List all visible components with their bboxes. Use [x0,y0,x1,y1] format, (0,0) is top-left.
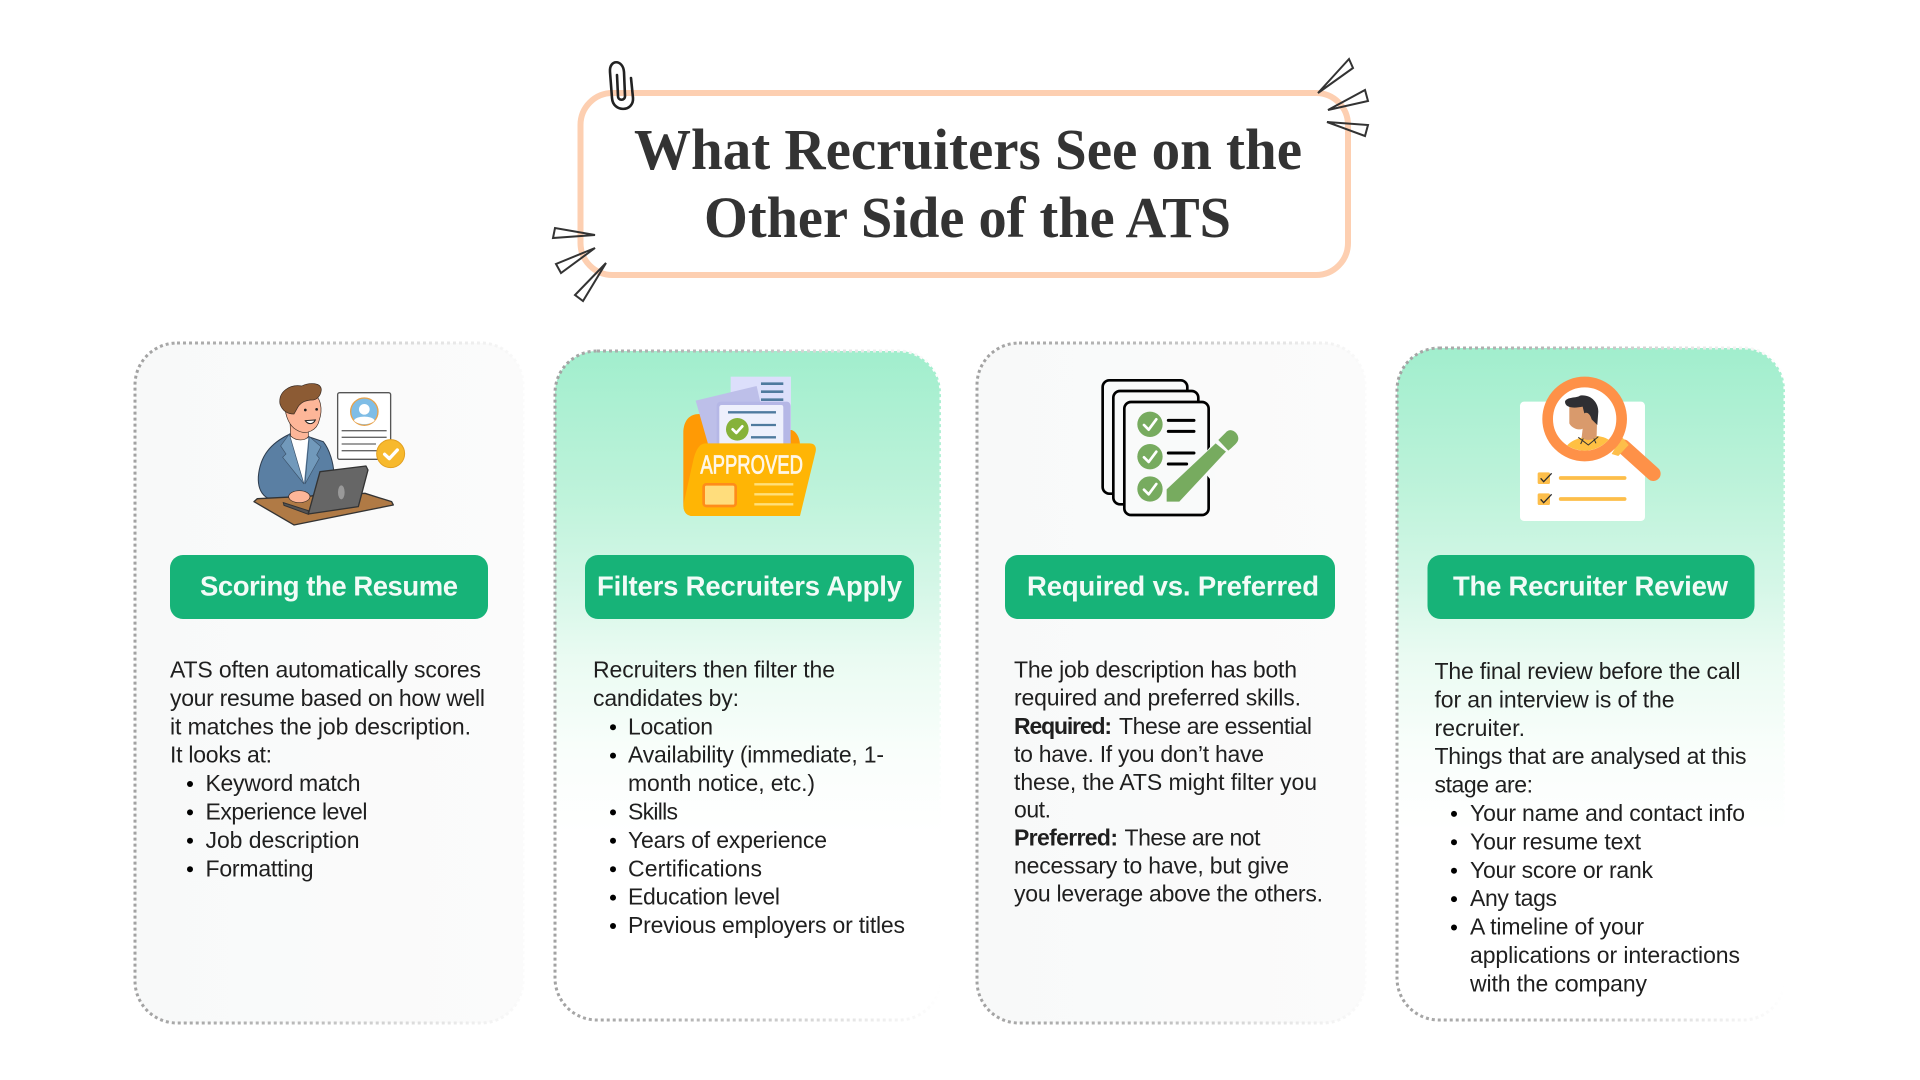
icon: man at laptop with resume [254,384,405,525]
panel: scoring the resume [135,343,523,1023]
text block: required vs preferred: Required: [1014,713,1112,739]
text block: the recruiter review: Your resume text [1470,828,1642,854]
heading: required vs preferred [1005,555,1335,619]
text block: filters recruiters apply: candidates by: [593,685,739,711]
text block: the recruiter review: A timeline of your [1470,914,1644,940]
text block: filters recruiters apply: Location [628,713,713,739]
heading: filters recruiters apply: Filters Recruiters Apply [597,570,903,602]
text block: required vs preferred: you leverage above the others. [1014,880,1323,906]
icon: magnifier over candidate profile [1520,382,1653,521]
heading: filters recruiters apply [585,555,914,619]
text block: scoring the resume: Experience level [206,798,368,824]
icon: checklist pages and pencil [1103,380,1238,515]
title [634,117,1302,250]
title: Other Side of the ATS [704,185,1231,250]
icon: sparkle strokes bottom left [553,228,606,301]
text block: required vs preferred: these, the ATS might filter you [1014,769,1317,795]
text block: the recruiter review: Your name and contact info [1470,800,1745,826]
text block: the recruiter review: recruiter. [1434,715,1525,741]
text block: scoring the resume [170,656,485,881]
text block: filters recruiters apply: Availability (immediate, 1- [628,742,884,768]
text block: the recruiter review: stage are: [1434,772,1533,798]
text block: required vs preferred [1014,656,1323,906]
text block: the recruiter review: with the company [1469,970,1648,996]
text block: scoring the resume: ATS often automatically scores [170,656,481,682]
icon: paperclip [610,62,633,109]
text block: required vs preferred: These are essential [1119,713,1312,739]
text block: the recruiter review: Any tags [1470,885,1557,911]
text block: scoring the resume: it matches the job description. [170,713,471,739]
icon: approved folder [683,377,816,516]
text block: scoring the resume: It looks at: [170,742,272,768]
heading: required vs preferred: Required vs. Preferred [1027,570,1319,602]
text block: filters recruiters apply: Certifications [628,855,762,881]
heading: scoring the resume [170,555,488,619]
text block: the recruiter review: The final review before the call [1434,658,1740,684]
text block: scoring the resume: Job description [206,827,360,853]
heading: scoring the resume: Scoring the Resume [200,570,458,602]
text block: filters recruiters apply: month notice, etc.) [628,770,815,796]
text block: filters recruiters apply: Previous employers or titles [628,912,905,938]
text block: required vs preferred: These are not [1124,824,1261,850]
text block: scoring the resume: Keyword match [206,770,360,796]
panel: required vs preferred [977,343,1365,1023]
text block: filters recruiters apply [593,656,905,938]
text block: filters recruiters apply: Skills [628,798,678,824]
heading: the recruiter review [1428,555,1754,619]
text block: filters recruiters apply: Education level [628,884,780,910]
text block: the recruiter review: Your score or rank [1470,857,1654,883]
text block: scoring the resume: Formatting [206,855,314,881]
text block: required vs preferred: out. [1014,796,1051,822]
text block: required vs preferred: required and preferred skills. [1014,685,1301,711]
text block: required vs preferred: to have. If you don’t have [1014,741,1264,767]
text block: scoring the resume: your resume based on how well [170,685,485,711]
text block: filters recruiters apply: Recruiters then filter the [593,656,835,682]
text block: the recruiter review: for an interview is of the [1434,686,1674,712]
title: What Recruiters See on the [634,117,1302,182]
text block: required vs preferred: Preferred: [1014,824,1118,850]
icon: sparkle strokes top right [1318,59,1368,136]
text block: required vs preferred: The job description has both [1014,656,1297,682]
title frame [553,59,1368,301]
text block: the recruiter review: Things that are analysed at this [1434,743,1746,769]
icon: approved folder: APPROVED [700,450,803,480]
text block: the recruiter review [1434,658,1746,996]
text block: the recruiter review: applications or interactions [1470,942,1740,968]
text block: required vs preferred: necessary to have, but give [1014,852,1289,878]
panel: the recruiter review [1397,348,1785,1020]
heading: the recruiter review: The Recruiter Review [1453,570,1729,602]
panel: filters recruiters apply [555,351,941,1020]
text block: filters recruiters apply: Years of experience [628,827,827,853]
